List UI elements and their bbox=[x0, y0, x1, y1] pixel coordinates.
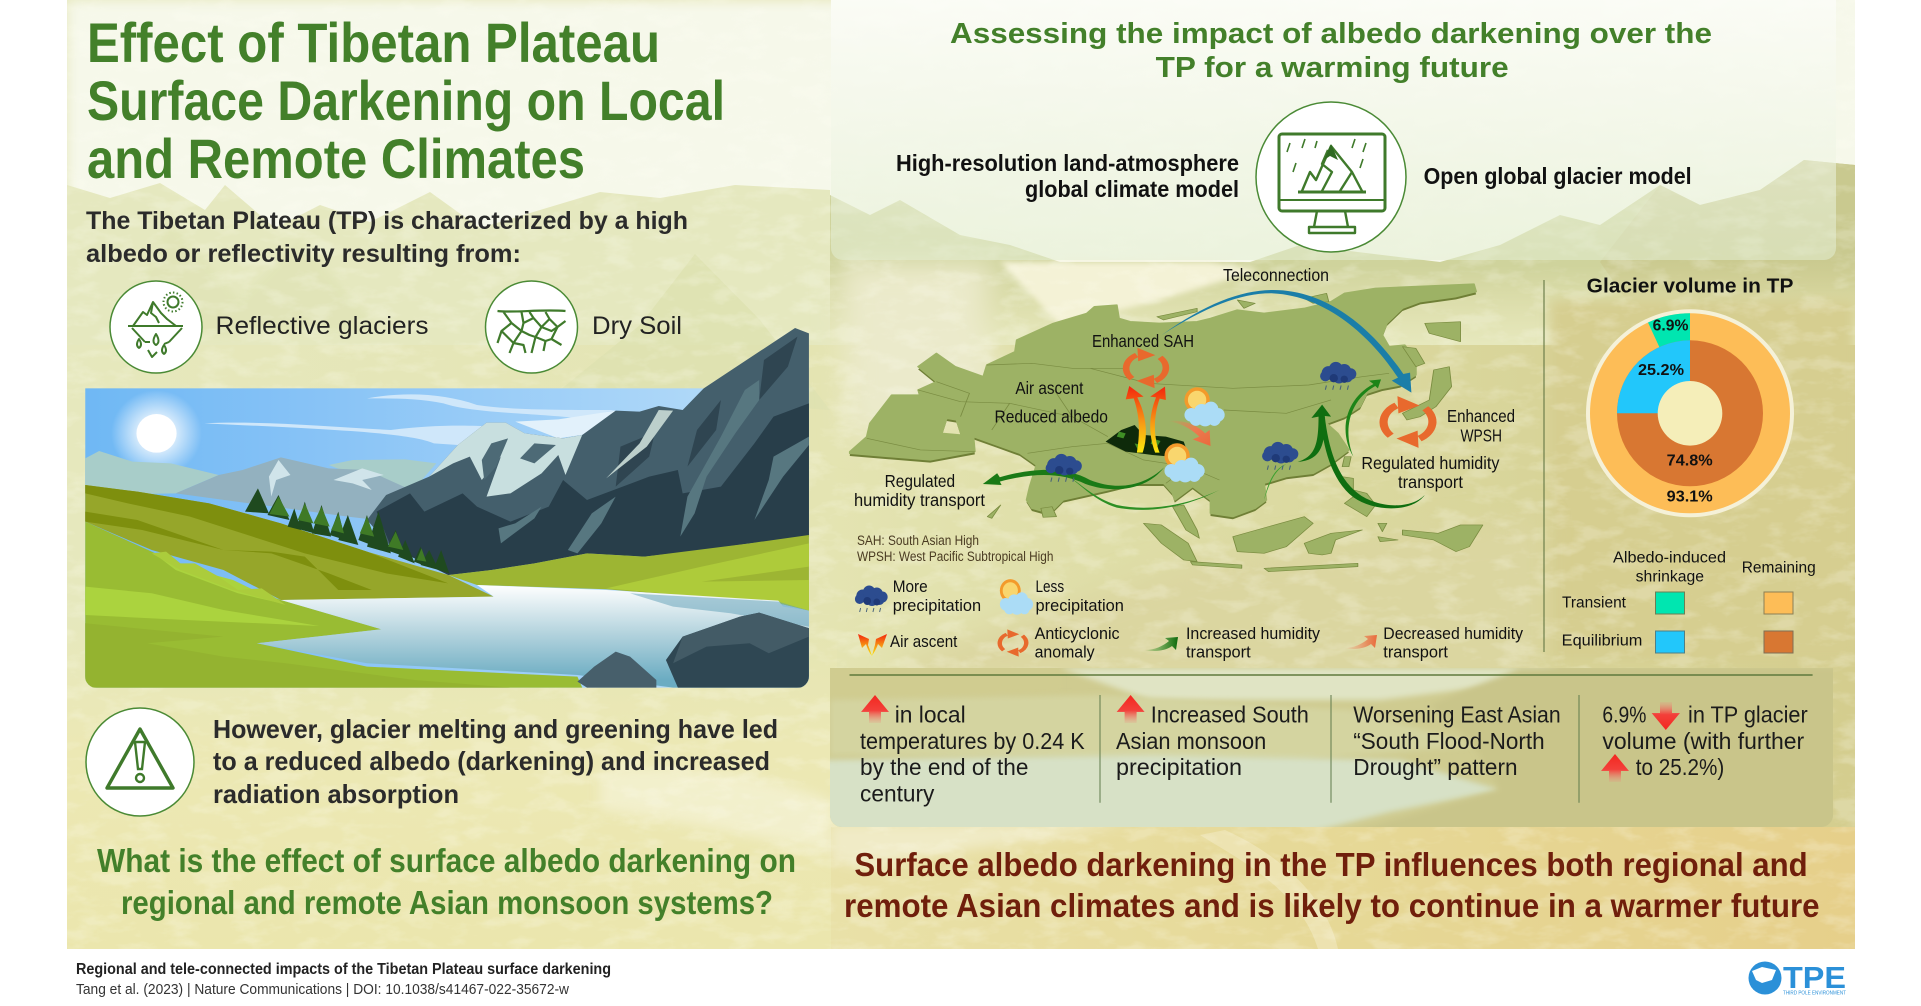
icon: monitor with mountain bbox=[1256, 102, 1406, 252]
panel: bottom results background bbox=[820, 668, 1840, 835]
legend: increased humidity transport: Increased humidity bbox=[1186, 624, 1320, 643]
finding: monsoon precipitation: Increased South bbox=[1151, 702, 1309, 728]
map labels: Regulated bbox=[885, 471, 955, 491]
finding: local temperature: temperatures by 0.24 K bbox=[860, 728, 1085, 754]
icon: less precipitation north bbox=[1184, 387, 1225, 426]
finding: glacier volume: in TP glacier bbox=[1688, 702, 1808, 728]
label: climate model: High-resolution land-atmosphere bbox=[896, 150, 1239, 176]
chart heading: Glacier volume in TP bbox=[1587, 276, 1793, 298]
citation footer: Regional and tele-connected impacts of the Tibetan Plateau surface darkening bbox=[76, 961, 611, 978]
title: and Remote Climates bbox=[87, 127, 585, 190]
donut chart: 25.2% bbox=[1638, 362, 1684, 379]
finding: local temperature bbox=[860, 695, 1085, 807]
legend: less precipitation: precipitation bbox=[1036, 596, 1124, 615]
map labels: WPSH bbox=[1460, 426, 1502, 446]
title: Effect of Tibetan Plateau bbox=[87, 11, 660, 74]
finding: glacier volume: volume (with further bbox=[1602, 728, 1804, 754]
map labels: Enhanced bbox=[1447, 406, 1515, 426]
legend: less precipitation: Less bbox=[1036, 577, 1064, 596]
finding: local temperature: by the end of the bbox=[860, 754, 1028, 780]
label: climate model: global climate model bbox=[1025, 176, 1239, 202]
finding: local temperature: in local bbox=[895, 702, 966, 728]
icon: anticyclone WPSH bbox=[1384, 396, 1432, 448]
finding: flood drought pattern: “South Flood-North bbox=[1353, 728, 1545, 754]
legend: decreased humidity transport bbox=[1344, 624, 1523, 662]
chart legend: Transient bbox=[1562, 595, 1627, 612]
label: dry soil: Dry Soil bbox=[592, 312, 682, 340]
finding: flood drought pattern: Drought” pattern bbox=[1353, 754, 1518, 780]
conclusion: remote Asian climates and is likely to continue in a warmer future bbox=[844, 887, 1820, 924]
icon: more precipitation north bbox=[1320, 362, 1356, 390]
map islands bbox=[987, 293, 1483, 572]
legend: more precipitation: precipitation bbox=[893, 596, 981, 615]
title bbox=[87, 11, 725, 190]
panel: top model panel background bbox=[831, 0, 1836, 260]
text: albedo darkening statement: to a reduced albedo (darkening) and increased bbox=[213, 746, 770, 776]
map mainland bbox=[850, 284, 1476, 517]
icon: more precipitation west bbox=[1046, 454, 1082, 482]
legend: anticyclonic anomaly: Anticyclonic bbox=[1035, 624, 1120, 643]
icon: less precipitation south bbox=[1164, 443, 1205, 482]
text: albedo darkening statement: However, glacier melting and greening have led bbox=[213, 714, 778, 744]
finding: flood drought pattern bbox=[1353, 702, 1561, 780]
country borders bbox=[867, 363, 1389, 483]
citation footer bbox=[76, 961, 611, 998]
chart legend bbox=[1562, 550, 1816, 653]
legend: decreased humidity transport: Decreased humidity bbox=[1383, 624, 1523, 643]
finding: monsoon precipitation: Asian monsoon bbox=[1116, 728, 1266, 754]
findings row bbox=[860, 695, 1808, 807]
chart legend: Albedo-induced bbox=[1613, 550, 1726, 567]
legend: air ascent bbox=[858, 632, 958, 656]
logo: TPE: THIRD POLE ENVIRONMENT bbox=[1783, 990, 1846, 996]
icon: reflective glaciers bbox=[110, 281, 202, 373]
donut chart: 74.8% bbox=[1667, 453, 1713, 470]
icon: dry soil bbox=[486, 281, 578, 373]
abbreviations note: WPSH: West Pacific Subtropical High bbox=[857, 549, 1053, 564]
chart legend: Remaining bbox=[1742, 559, 1816, 576]
donut chart bbox=[1586, 309, 1794, 517]
heading: assessing impact: Assessing the impact of albedo darkening over the bbox=[950, 18, 1712, 50]
icon: anticyclone SAH bbox=[1126, 348, 1166, 388]
chart legend: shrinkage bbox=[1636, 569, 1704, 586]
map land shadow bbox=[850, 287, 1476, 519]
text: albedo darkening statement bbox=[213, 714, 778, 809]
air ascent arrows bbox=[1126, 386, 1166, 453]
title: Surface Darkening on Local bbox=[87, 69, 725, 132]
heading: assessing impact: TP for a warming future bbox=[1156, 52, 1509, 84]
intro text: The Tibetan Plateau (TP) is characterized by a high bbox=[86, 207, 688, 235]
panel: glacier volume chart bbox=[1544, 276, 1816, 653]
map legend bbox=[855, 577, 1523, 662]
heading: assessing impact bbox=[950, 18, 1712, 84]
intro text bbox=[86, 207, 688, 268]
finding: glacier volume: 6.9% bbox=[1602, 702, 1646, 728]
logo: TPE: TPE bbox=[1783, 960, 1846, 995]
text: albedo darkening statement: radiation absorption bbox=[213, 779, 459, 809]
conclusion: Surface albedo darkening in the TP influences both regional and bbox=[854, 846, 1808, 883]
legend: more precipitation: More bbox=[893, 577, 928, 596]
dark albedo patch bbox=[1106, 425, 1187, 457]
label: climate model bbox=[896, 150, 1239, 202]
research question: regional and remote Asian monsoon systems? bbox=[121, 884, 773, 921]
research question: What is the effect of surface albedo darkening on bbox=[97, 842, 796, 879]
map labels: Air ascent bbox=[1015, 378, 1084, 398]
decreased humidity arrow bbox=[1168, 421, 1211, 446]
regulated humidity arrows east bbox=[1264, 379, 1425, 508]
legend: increased humidity transport bbox=[1145, 624, 1320, 662]
map labels: Regulated humidity bbox=[1361, 453, 1500, 473]
research question bbox=[97, 842, 796, 921]
map labels: Enhanced SAH bbox=[1092, 331, 1194, 351]
conclusion bbox=[844, 846, 1820, 924]
finding: flood drought pattern: Worsening East Asian bbox=[1353, 702, 1561, 728]
regulated humidity arrow west bbox=[983, 467, 1219, 510]
donut chart: 6.9% bbox=[1653, 318, 1689, 335]
abbreviations note: SAH: South Asian High bbox=[857, 533, 979, 548]
map labels: Reduced albedo bbox=[994, 407, 1108, 427]
finding: monsoon precipitation: precipitation bbox=[1116, 754, 1242, 780]
finding: glacier volume bbox=[1601, 702, 1808, 782]
map labels: Teleconnection bbox=[1223, 265, 1329, 285]
citation footer: Tang et al. (2023) | Nature Communications | DOI: 10.1038/s41467-022-35672-w bbox=[76, 982, 569, 998]
legend: anticyclonic anomaly: anomaly bbox=[1035, 643, 1095, 662]
legend: air ascent: Air ascent bbox=[890, 632, 958, 651]
map labels bbox=[854, 265, 1515, 510]
logo: TPE bbox=[1748, 960, 1846, 996]
map labels: transport bbox=[1398, 472, 1463, 492]
map of Asia bbox=[850, 284, 1483, 572]
chart legend: Equilibrium bbox=[1562, 633, 1642, 650]
legend: less precipitation bbox=[1000, 577, 1124, 615]
label: glacier model: Open global glacier model bbox=[1424, 163, 1692, 189]
legend: anticyclonic anomaly bbox=[1000, 624, 1120, 662]
finding: glacier volume: to 25.2%) bbox=[1636, 754, 1724, 780]
illustration: mountain lake scene bbox=[85, 328, 809, 688]
teleconnection arrow bbox=[1161, 290, 1411, 393]
map labels: humidity transport bbox=[854, 490, 985, 510]
donut chart: 93.1% bbox=[1667, 489, 1713, 506]
legend: decreased humidity transport: transport bbox=[1383, 643, 1448, 662]
abbreviations note bbox=[857, 533, 1053, 564]
finding: monsoon precipitation bbox=[1116, 695, 1309, 780]
divider above findings bbox=[850, 674, 1813, 676]
warning icon bbox=[86, 708, 194, 816]
finding: local temperature: century bbox=[860, 781, 935, 807]
label: reflective glaciers: Reflective glaciers bbox=[216, 312, 428, 340]
icon: more precipitation south bbox=[1262, 442, 1298, 470]
legend: increased humidity transport: transport bbox=[1186, 643, 1251, 662]
intro text: albedo or reflectivity resulting from: bbox=[86, 240, 521, 268]
legend: more precipitation bbox=[855, 577, 981, 615]
